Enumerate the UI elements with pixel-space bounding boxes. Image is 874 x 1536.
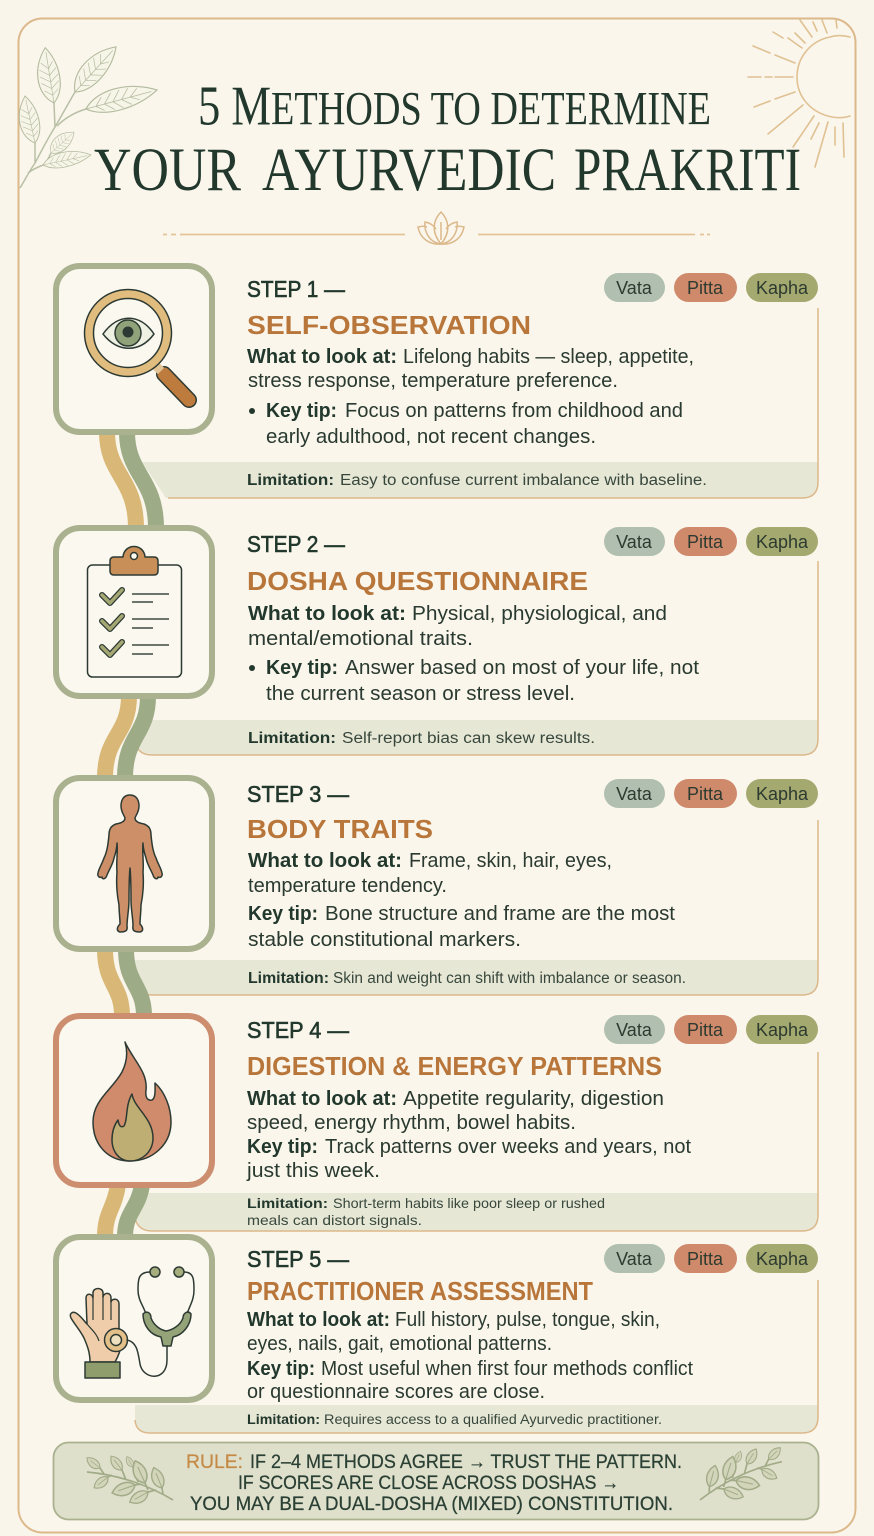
right sprig (694, 1443, 789, 1507)
icon box: flame (56, 1016, 212, 1185)
title: PRAKRITI (574, 137, 801, 204)
step 5 description (247, 1309, 660, 1355)
step 2 description: What to look at: (248, 603, 406, 625)
step 4 limitation (247, 1195, 605, 1228)
icon box: magnifying glass with eye (56, 266, 212, 432)
step 4 description (247, 1088, 664, 1134)
step 2 dosha tags (604, 527, 818, 556)
step 1 key tip (249, 400, 683, 448)
panel: step 1 card (142, 273, 818, 498)
title: 5 METHODS TO DETERMINE (198, 76, 711, 138)
step 3 dosha tags: Pitta (687, 784, 724, 804)
step 1 limitation: Limitation: (247, 472, 334, 489)
step 1 description (247, 346, 694, 392)
step 1 description: stress response, temperature preference. (248, 370, 618, 392)
panel: step 4 card (135, 1015, 818, 1231)
step 4 heading: DIGESTION & ENERGY PATTERNS (247, 1051, 662, 1081)
icon box: hand with stethoscope (56, 1237, 212, 1400)
rule text: RULE: (186, 1452, 243, 1473)
step 5 key tip: Most useful when first four methods conflict (321, 1358, 693, 1380)
step 5 key tip (247, 1358, 693, 1403)
decoration: leafy branch (15, 39, 160, 188)
panel: step 3 card (135, 779, 818, 995)
step 1 dosha tags (604, 273, 818, 302)
step 5 key tip: or questionnaire scores are close. (247, 1381, 545, 1403)
step 3 description: temperature tendency. (248, 875, 447, 897)
step 1 key tip: early adulthood, not recent changes. (266, 426, 596, 448)
step 2 limitation: Self-report bias can skew results. (342, 730, 595, 747)
step 4 label: STEP 4 — (247, 1017, 349, 1043)
title divider with lotus (163, 212, 710, 244)
step 3 limitation: Limitation: (248, 970, 329, 987)
step 3 dosha tags: Kapha (756, 784, 809, 804)
title: YOUR (94, 137, 241, 204)
step 3 description: What to look at: (248, 850, 402, 872)
step 4 key tip: Track patterns over weeks and years, not (325, 1136, 691, 1158)
panel: step 2 card (135, 527, 818, 755)
title (94, 76, 801, 204)
decoration: sun (748, 20, 850, 167)
connector: step 3 to step 4 (105, 949, 144, 1016)
step 1 limitation: Easy to confuse current imbalance with baseline. (340, 472, 707, 489)
step 1 key tip: Focus on patterns from childhood and (345, 400, 683, 422)
step 5 limitation: Limitation: (247, 1412, 320, 1427)
step 2 dosha tags: Kapha (756, 532, 809, 552)
step 4 key tip: just this week. (246, 1160, 380, 1182)
step 5 dosha tags: Pitta (687, 1249, 724, 1269)
rule text (186, 1452, 682, 1515)
step 1 heading: SELF-OBSERVATION (247, 310, 531, 340)
step 1 label: STEP 1 — (247, 276, 345, 302)
step 2 description: Physical, physiological, and (412, 603, 667, 625)
step 2 description (248, 603, 667, 650)
step 4 dosha tags: Kapha (756, 1020, 809, 1040)
connector: step 2 to step 3 (105, 696, 148, 778)
panel: step 5 card (135, 1244, 818, 1433)
icon box: human body (56, 778, 212, 949)
step 5 key tip: Key tip: (247, 1358, 315, 1380)
title: AYURVEDIC (262, 137, 556, 204)
step 1 dosha tags: Kapha (756, 278, 809, 298)
step 2 limitation (248, 730, 595, 747)
step 4 description: speed, energy rhythm, bowel habits. (247, 1112, 576, 1134)
step 4 dosha tags: Vata (616, 1020, 653, 1040)
step 5 description: Full history, pulse, tongue, skin, (395, 1309, 660, 1331)
step 4 dosha tags (604, 1015, 818, 1044)
step 1 dosha tags: Pitta (687, 278, 724, 298)
left sprig (84, 1454, 173, 1507)
step 3 dosha tags: Vata (616, 784, 653, 804)
step 4 description: Appetite regularity, digestion (403, 1088, 664, 1110)
step 3 key tip (248, 903, 675, 951)
step 4 key tip (246, 1136, 691, 1182)
step 3 dosha tags (604, 779, 818, 808)
step 1 description: What to look at: (247, 346, 397, 368)
step 2 key tip (249, 657, 699, 705)
connector: step 1 to step 2 (107, 432, 156, 528)
step 5 heading: PRACTITIONER ASSESSMENT (247, 1276, 593, 1306)
rule text: IF 2–4 METHODS AGREE → TRUST THE PATTERN. (250, 1452, 682, 1473)
step 4 limitation: meals can distort signals. (247, 1212, 422, 1228)
step 3 key tip: stable constitutional markers. (248, 929, 521, 951)
rule callout (54, 1442, 818, 1520)
step 2 dosha tags: Pitta (687, 532, 724, 552)
step 5 dosha tags: Kapha (756, 1249, 809, 1269)
connector: step 4 to step 5 (105, 1185, 142, 1237)
step 5 dosha tags: Vata (616, 1249, 653, 1269)
icon box: clipboard checklist (56, 528, 212, 696)
step 2 key tip: the current season or stress level. (266, 683, 575, 705)
step 2 dosha tags: Vata (616, 532, 653, 552)
step 4 limitation: Short-term habits like poor sleep or rushed (333, 1195, 605, 1211)
step 1 key tip: Key tip: (266, 400, 337, 422)
step 5 dosha tags (604, 1244, 818, 1273)
step 4 description: What to look at: (247, 1088, 397, 1110)
step 3 description: Frame, skin, hair, eyes, (409, 850, 612, 872)
step 3 key tip: Key tip: (248, 903, 318, 925)
step 3 heading: BODY TRAITS (247, 814, 433, 844)
step 2 description: mental/emotional traits. (248, 628, 473, 650)
step 3 label: STEP 3 — (247, 781, 349, 807)
step 2 key tip: Key tip: (266, 657, 338, 679)
step 3 key tip: Bone structure and frame are the most (325, 903, 675, 925)
step 4 dosha tags: Pitta (687, 1020, 724, 1040)
step 4 limitation: Limitation: (247, 1195, 328, 1211)
step 2 label: STEP 2 — (247, 531, 345, 557)
step 5 description: What to look at: (247, 1309, 390, 1331)
rule text: YOU MAY BE A DUAL-DOSHA (MIXED) CONSTITUTION. (190, 1494, 673, 1515)
step 2 key tip: Answer based on most of your life, not (345, 657, 699, 679)
step 1 dosha tags: Vata (616, 278, 653, 298)
step 1 description: Lifelong habits — sleep, appetite, (403, 346, 694, 368)
rule text: IF SCORES ARE CLOSE ACROSS DOSHAS → (238, 1473, 619, 1494)
step 5 limitation: Requires access to a qualified Ayurvedic practitioner. (324, 1412, 662, 1427)
step 3 limitation: Skin and weight can shift with imbalance or season. (333, 970, 686, 987)
step 2 heading: DOSHA QUESTIONNAIRE (247, 566, 588, 596)
step 5 label: STEP 5 — (247, 1246, 349, 1272)
step 5 description: eyes, nails, gait, emotional patterns. (247, 1333, 552, 1355)
step 3 description (248, 850, 612, 897)
step 4 key tip: Key tip: (247, 1136, 318, 1158)
step 2 limitation: Limitation: (248, 730, 336, 747)
